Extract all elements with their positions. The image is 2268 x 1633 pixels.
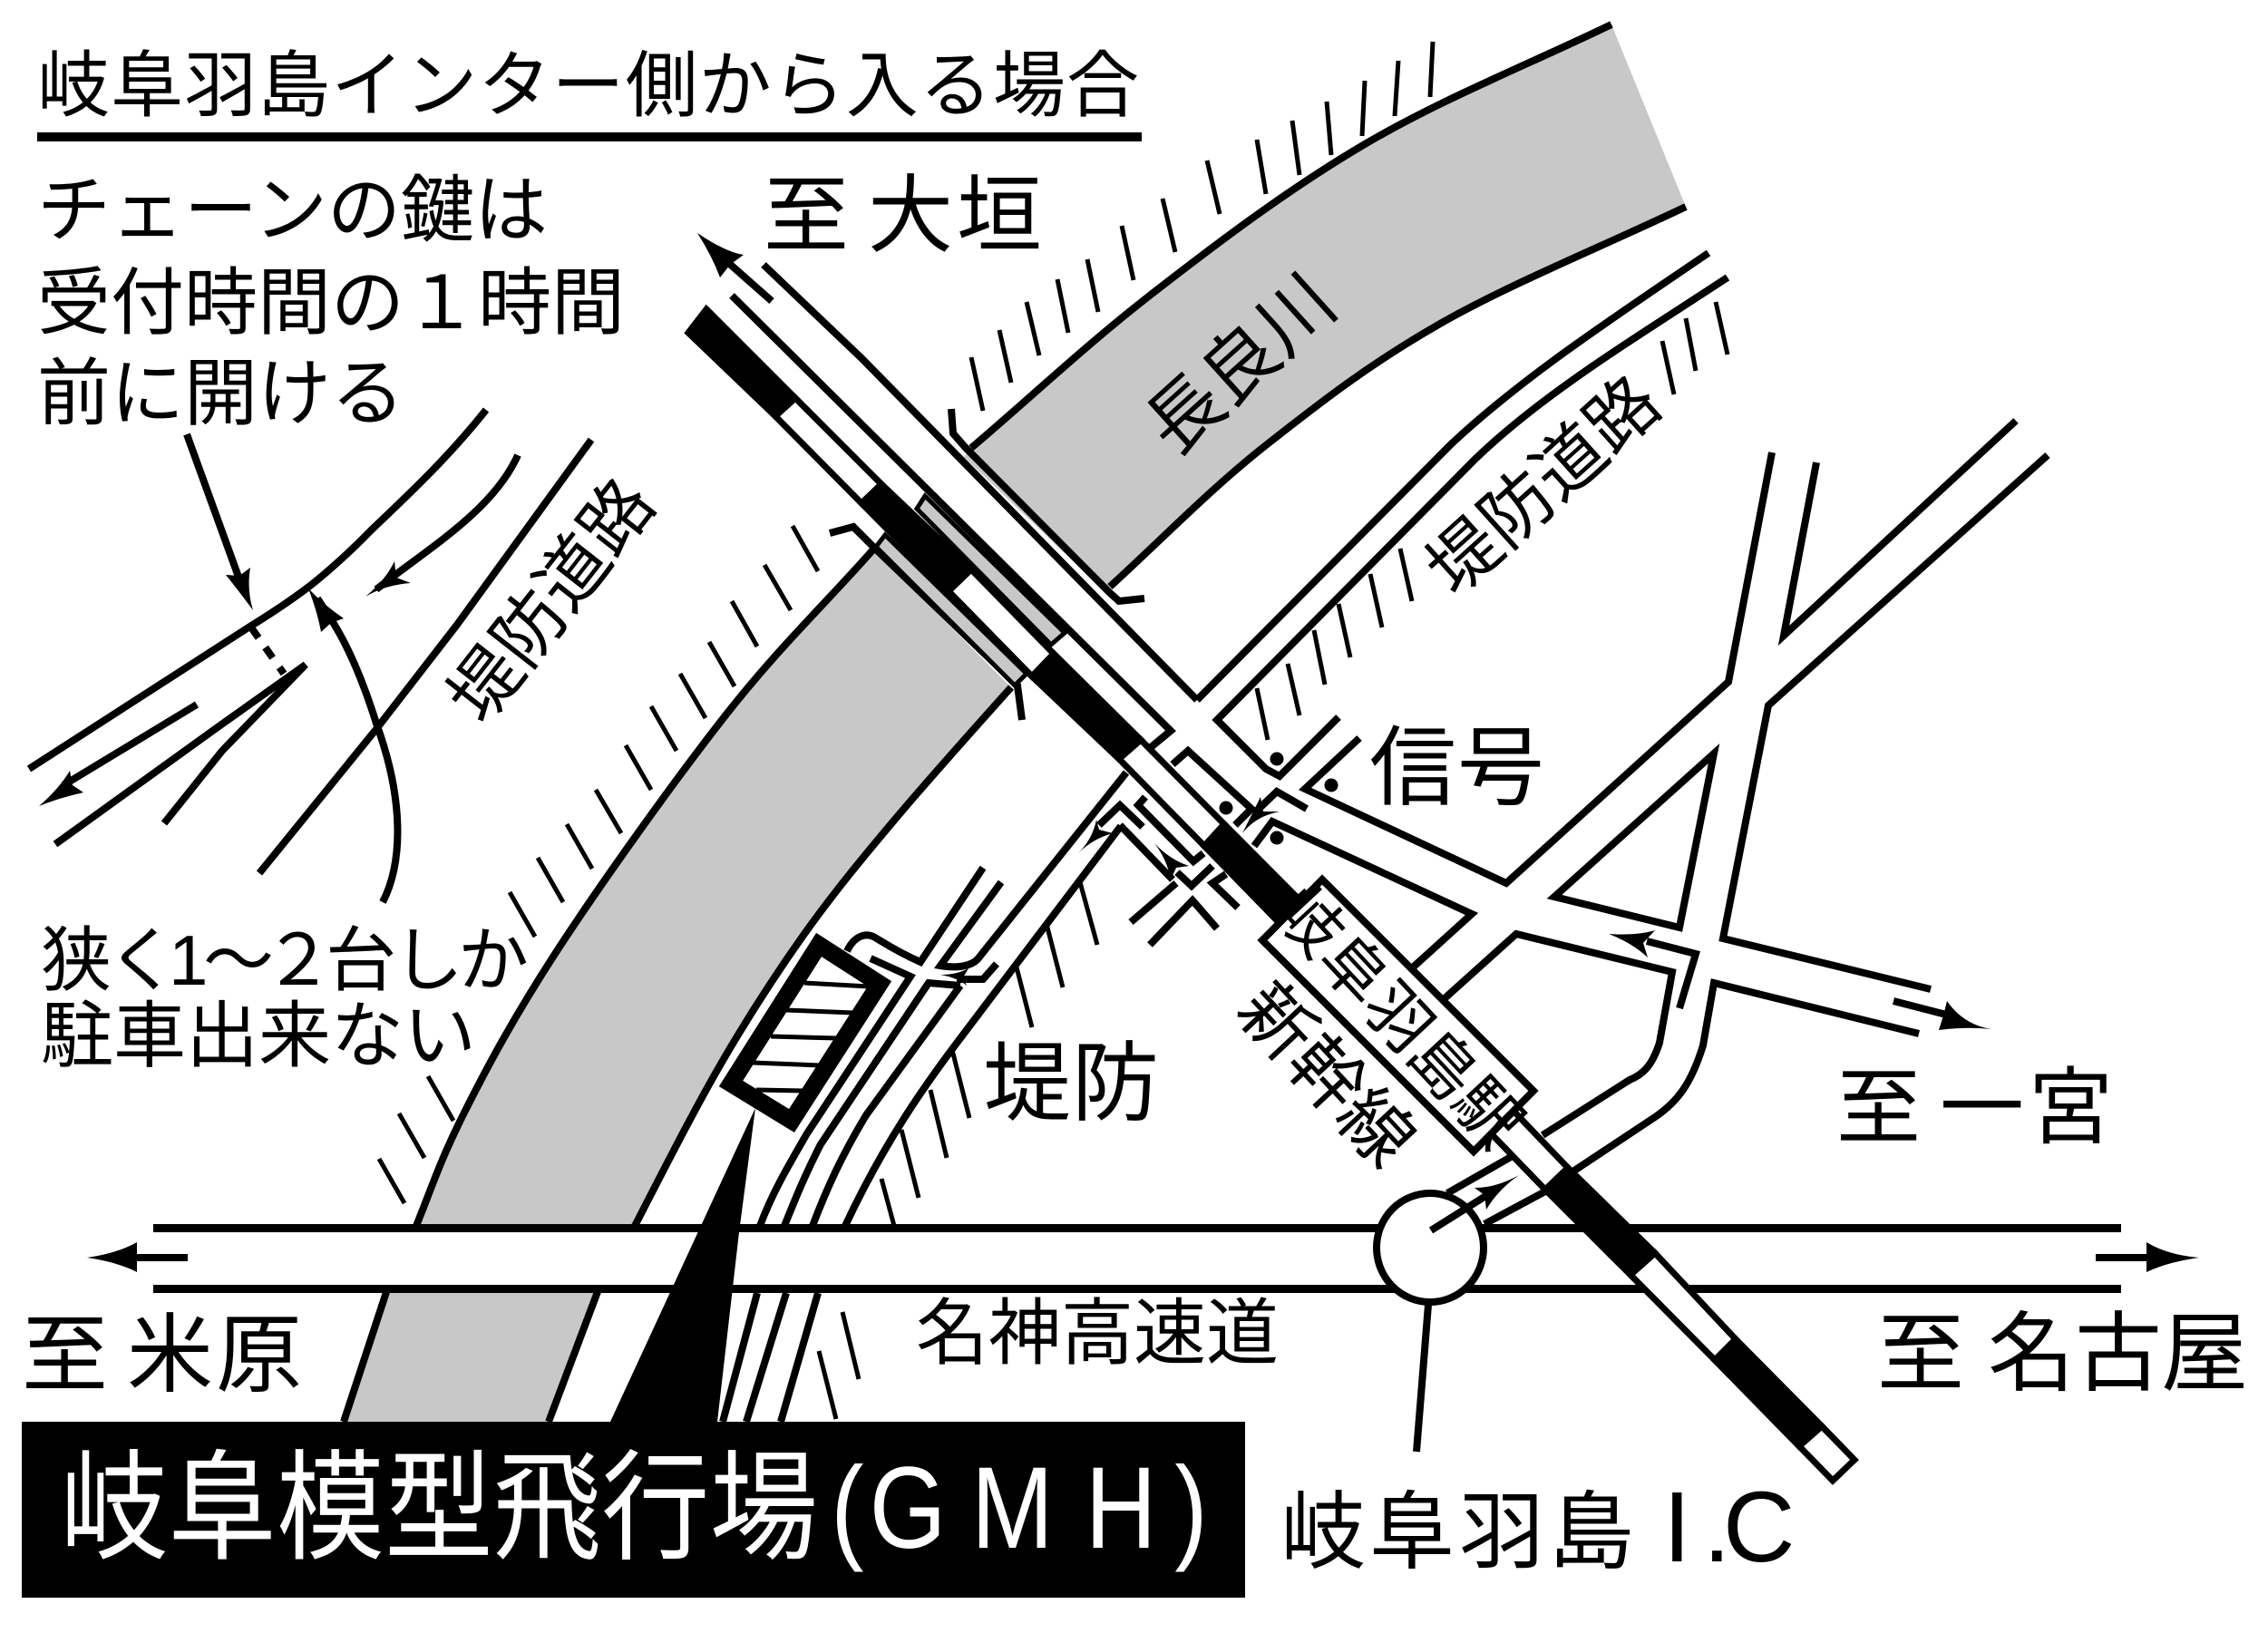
arrow: from interchange to north [1609,930,1696,1008]
parking area [731,945,880,1121]
expressway: Meishin [153,1224,2121,1293]
pointer wedge: from parking to airfield label [610,1108,755,1422]
note: chain key [37,170,625,435]
title box: Gifu model airfield: (GMH) [831,1443,1208,1573]
arrowhead: along levee road [1078,820,1113,853]
river: gray gaps under the Shinkansen bridge [876,496,1065,685]
label: to Maibara: 至米原 [22,1307,302,1404]
roads: levee road to the northeast [1197,253,1728,776]
title: 岐阜羽島インター側から入る場合 [37,45,1139,126]
signal dots [1219,753,1338,845]
label: to Nagoya: 至名古屋 [1877,1306,2248,1403]
note: chain key: チェーンの鍵は [37,170,548,252]
embankment ticks along lower river [379,526,818,1203]
label: levee road right: 堤防道路 [1412,361,1675,609]
river: upper Nagara river band [951,24,1686,601]
title box: Gifu model airfield: 岐阜模型飛行場 [60,1442,818,1575]
note: narrow parking: 駐車出来ない [41,996,476,1076]
note: narrow parking: 狭く1～２台しか [41,920,529,1000]
label: to Ichinomiya: 至一宮 [1836,1061,2113,1155]
label: Gifu-Hashima IC [1280,1472,1795,1583]
roads: route toward Ichinomiya [1254,421,2048,1224]
arrow: toward Ichinomiya [1893,1001,1991,1030]
label: Nagara river: 長良川 [1130,259,1351,470]
label: levee road left: 堤防道路 [433,464,670,736]
label: Meishin expressway: 名神高速道 [916,1293,1279,1374]
embankment ticks along levee road [1257,302,1728,740]
note: chain key: 前に開ける [37,354,404,435]
embankment ticks along upper river [971,42,1433,411]
embankment ticks near parking [819,882,1097,1419]
arrow: toward Nagoya [2096,1242,2199,1272]
river: lower band below expressway [344,1289,599,1422]
interchange circle [1377,1175,1519,1452]
note: narrow parking [41,920,529,1076]
arrowhead: toward parking [940,968,969,986]
river: lower band above expressway [416,527,1022,1226]
title box: Gifu model airfield [22,1422,1245,1598]
label: Gifu-Hashima IC: 岐阜羽島 [1280,1484,1634,1580]
label: signal: 信号 [1369,720,1544,817]
arrow: toward Maibara [87,1242,188,1272]
arrowhead: under the track [1154,843,1189,880]
roads: curved levee bundle near parking [723,773,1238,1422]
label: Shinkansen: 新幹線 [1222,967,1430,1181]
Shinkansen track strip [688,309,1854,1481]
arrow: toward Ogaki [697,233,772,301]
note: chain key: 受付時間の１時間 [37,263,625,345]
label: to Ogaki: 至大垣 [764,168,1042,263]
inset: chain gate road diagram [29,410,591,902]
label: Gifu-Hashima IC: I.C [1663,1472,1795,1583]
label: embankment: 堤防 [984,1035,1159,1132]
station box: Gifu-Hashima: 岐阜羽島駅 [1260,874,1535,1162]
roads: main road from Ogaki with crossing [732,265,1251,861]
arrow: turn at signal [1242,792,1307,833]
